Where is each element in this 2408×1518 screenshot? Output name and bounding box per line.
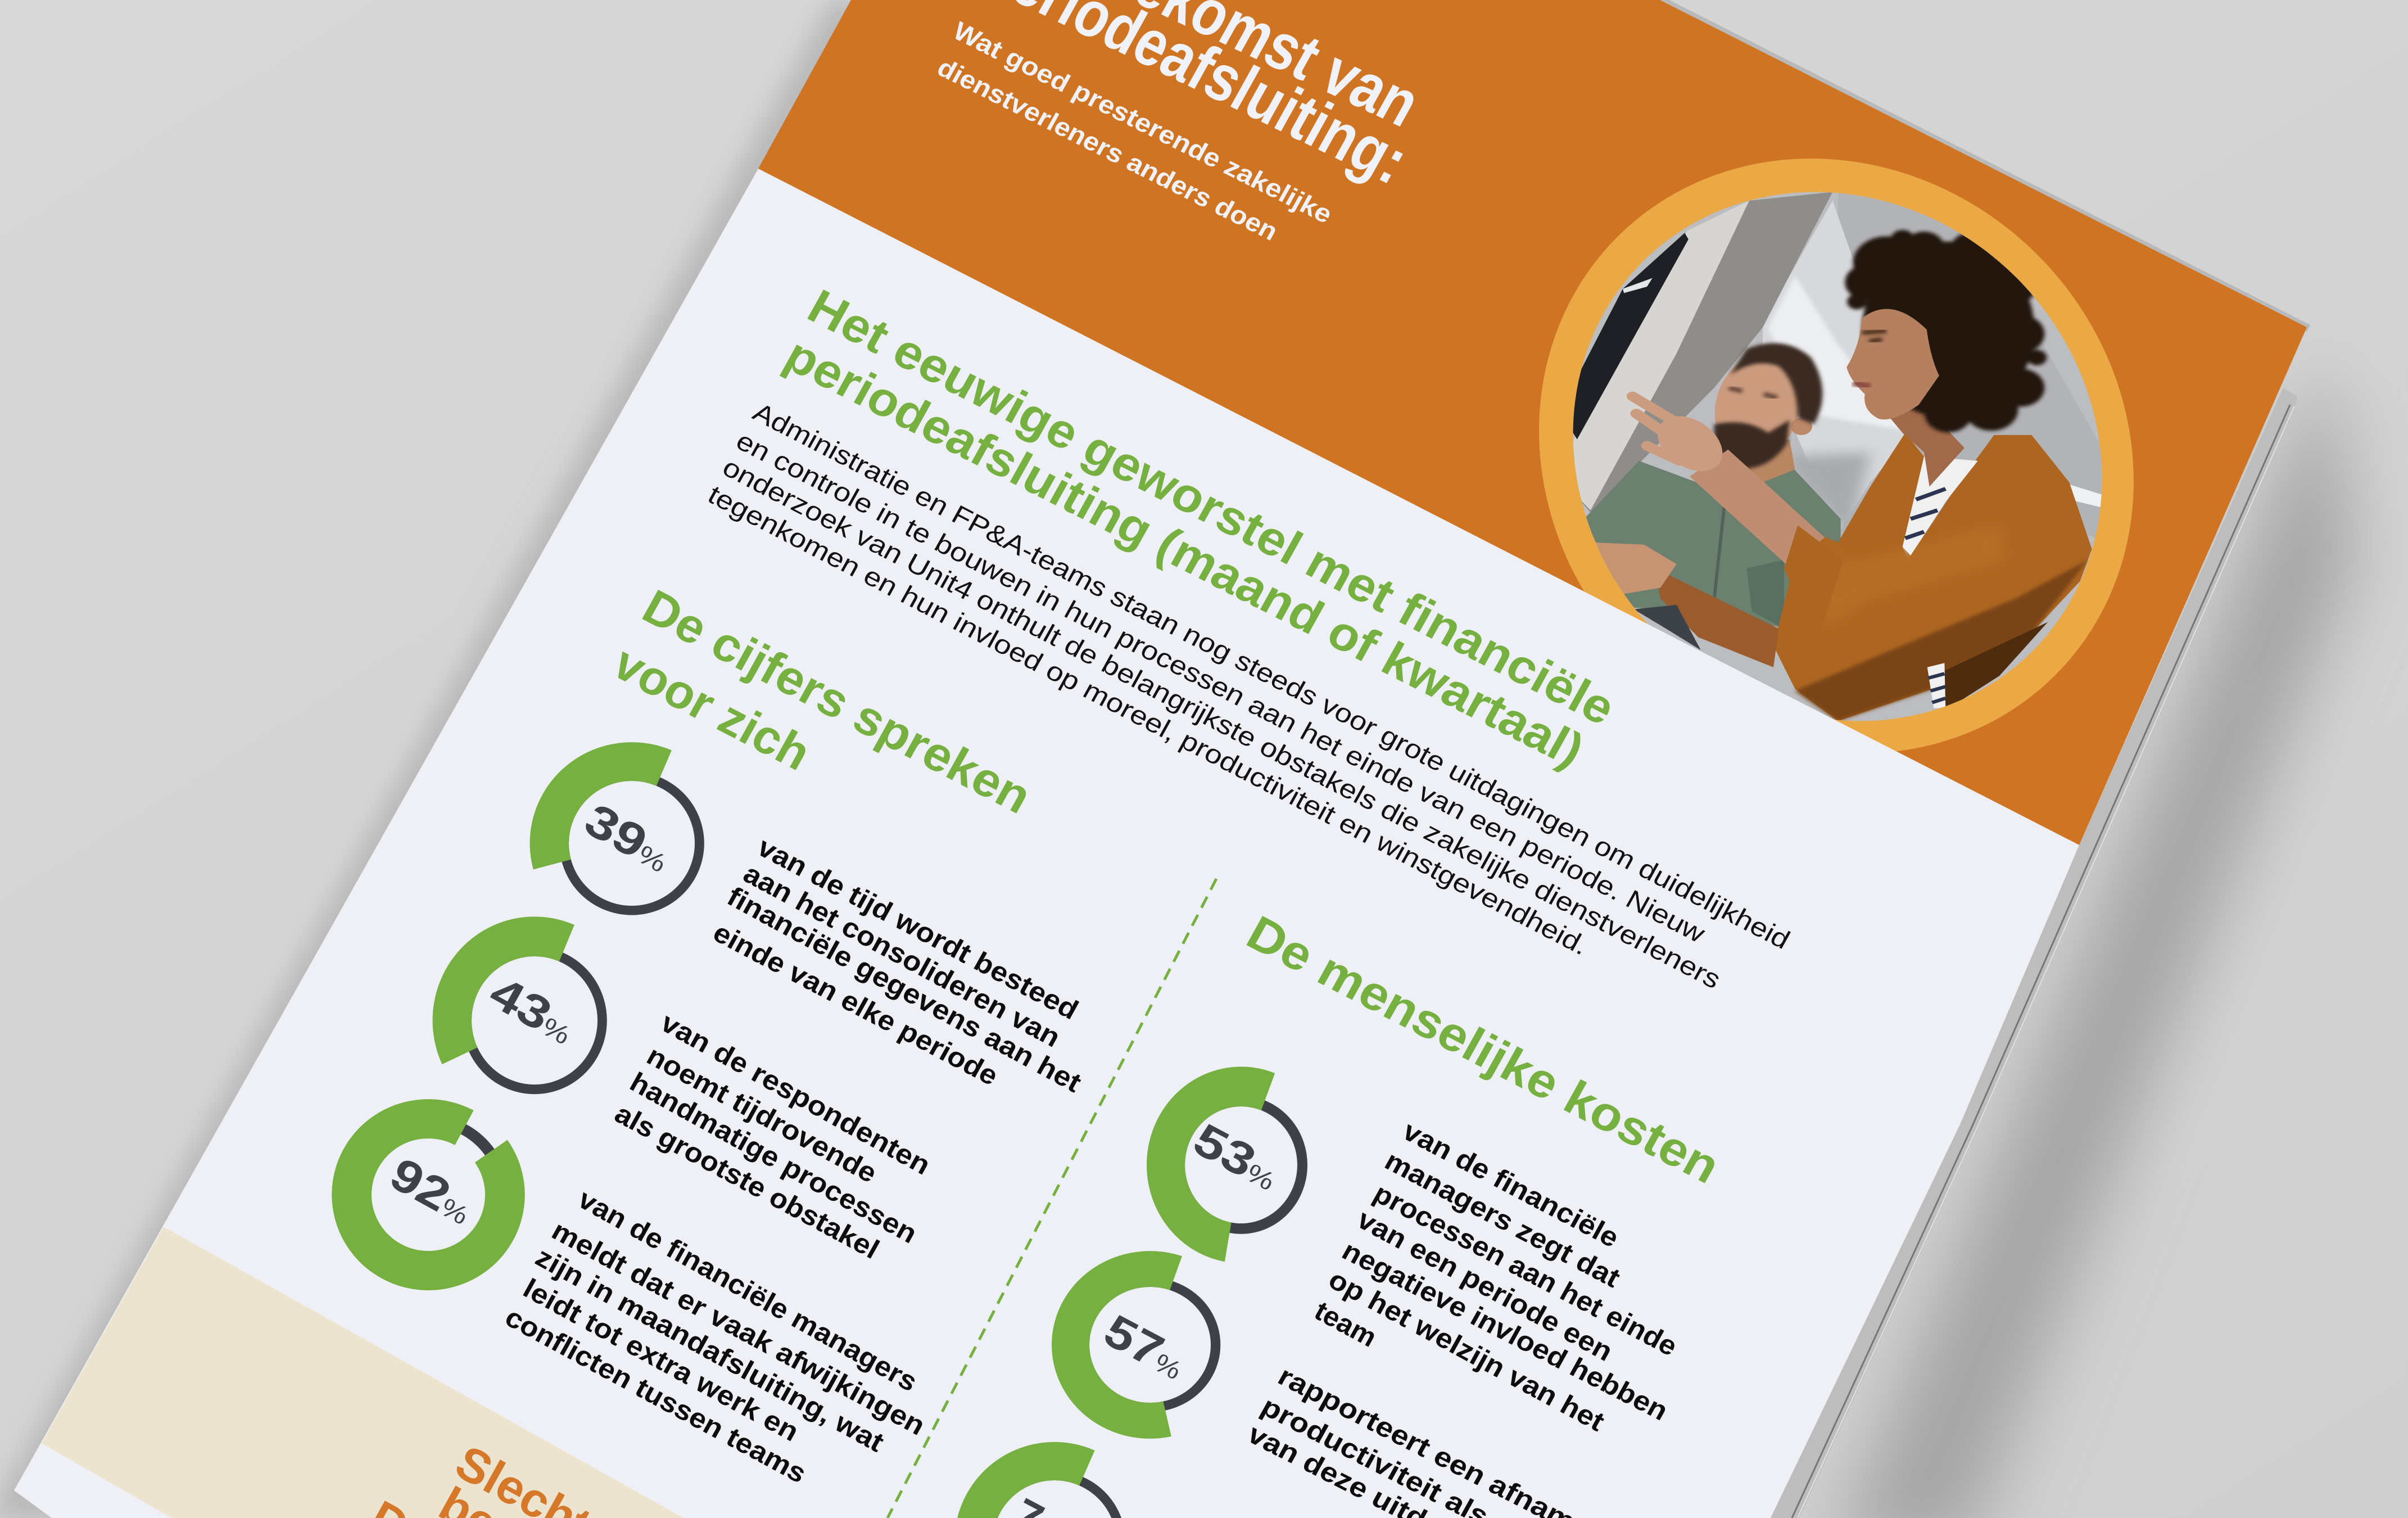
stat text: 43%: als grootste obstakel (610, 1098, 884, 1265)
photo: woman neck (1886, 388, 1965, 487)
heading: De cijfers spreken voor zich: De cijfers spreken (634, 580, 1040, 824)
photo: woman hand (1632, 396, 1736, 481)
photo: jacket body (1773, 433, 2092, 721)
main heading: Het eeuwige geworstel met financiële (799, 279, 1624, 735)
stat text: 92%: zijn in maandafsluiting, wat (531, 1241, 889, 1458)
intro text: onderzoek van Unit4 onthult de belangrijkste obstakels die zakelijke dienstverleners (718, 451, 1726, 995)
panel: orange header (758, 0, 2307, 845)
photo: pale window (1763, 201, 1913, 534)
stat: 53% donut (1154, 1074, 1328, 1255)
stat text: 92%: van de financiële managers (573, 1183, 922, 1398)
stat: 39% donut: 39% (576, 794, 680, 882)
column divider (888, 879, 1216, 1518)
stat text: 53%: processen aan het einde (1369, 1178, 1682, 1362)
stat text: 43%: noemt tijdrovende (642, 1040, 882, 1189)
stat: 57% donut: 57% (1096, 1305, 1195, 1389)
stat text: 53%: team (1310, 1295, 1382, 1353)
stat text: 43%: handmatige processen (625, 1067, 922, 1249)
photo: man hair (1730, 343, 1822, 424)
heading: De cijfers spreken voor zich: voor zich (605, 636, 820, 781)
photo: monitor (1572, 233, 1689, 439)
callout text (361, 1435, 623, 1518)
photo: woman eye, brow and lips (1862, 331, 1886, 341)
stat text: 43%: van de respondenten (656, 1007, 935, 1181)
photo ring (1416, 36, 2256, 876)
stat: 39% donut (531, 743, 733, 943)
top edge of the page (1655, 0, 2310, 332)
photo: right wall (1838, 190, 2107, 543)
stat text: 53%: negatieve invloed hebben (1337, 1235, 1673, 1426)
main heading: periodeafsluiting (maand of kwartaal) (776, 328, 1592, 778)
intro text (703, 396, 1795, 995)
stat text: 92%: meldt dat er vaak afwijkingen (547, 1215, 930, 1442)
stat text: 53% (1310, 1115, 1682, 1437)
stat text: 39%: financiële gegevens aan het (722, 881, 1087, 1099)
stat: 43% donut (425, 909, 644, 1132)
stat: 92% donut (322, 1089, 535, 1300)
intro text: Administratie en FP&A-teams staan nog steeds voor grote uitdagingen om duidelijkheid (748, 396, 1795, 955)
photo: woman raised forearm (1709, 463, 1805, 551)
photo: sleeve opening over forearm (1784, 525, 1843, 646)
photo: sleeve highlight (1817, 525, 2005, 629)
stat text: 53%: op het welzijn van het (1324, 1264, 1609, 1437)
photo: man beard (1714, 420, 1790, 469)
photo: man neck and head (1736, 439, 1795, 487)
stat: 92% donut: 92% (382, 1148, 482, 1234)
photo: jacket shadows (1795, 560, 2088, 721)
stat text: 92%: leidt tot extra werk en (518, 1273, 804, 1448)
photo: desk item (1633, 605, 1701, 650)
photo: striped shirt (1903, 457, 1978, 708)
photo: two colleagues at a screen (1573, 192, 2102, 721)
stat text: 43% (610, 1007, 935, 1265)
stat text: 39% (708, 832, 1087, 1099)
stat text: 53%: van de financiële (1398, 1115, 1624, 1254)
intro text: en controle in te bouwen in hun processen aan het einde van een periode. Nieuw (731, 425, 1711, 948)
photo: man eyes (1729, 388, 1777, 397)
stat text: 53%: managers zegt dat (1380, 1145, 1625, 1294)
heading: De menselijke kosten: De menselijke kosten (1238, 906, 1728, 1194)
subtitle: Wat goed presterende zakelijke (948, 16, 1337, 229)
stat text: 39%: aan het consolideren van (739, 858, 1065, 1053)
stat: third right donut, cropped (942, 1430, 1167, 1518)
stat text: 39%: van de tijd wordt besteed (753, 832, 1083, 1025)
photo: white wall stripe (2070, 485, 2102, 507)
stat text: 92%: conflicten tussen teams (500, 1302, 811, 1489)
stat text: 92% (500, 1183, 930, 1489)
stat text: 53%: van een periode een (1352, 1204, 1618, 1367)
subtitle: dienstverleners anders doen (933, 52, 1283, 246)
photo: woman face (1846, 309, 1939, 419)
photo: man shirt (1584, 459, 1841, 629)
intro text: tegenkomen en hun invloed op moreel, productiviteit en winstgevendheid. (703, 479, 1594, 961)
stat: 57% donut (1055, 1254, 1245, 1435)
photo: concrete pillar (1572, 192, 1832, 512)
stat: 43% donut: 43% (481, 966, 584, 1054)
photo: woman hair (1845, 230, 2047, 432)
stat: 53% donut: 53% (1185, 1114, 1288, 1200)
page stack edge (1765, 388, 2297, 1518)
panel: beige callout band (42, 1227, 684, 1518)
stat text: 39%: einde van elke periode (708, 917, 1003, 1091)
panel: white page body (14, 169, 2079, 1518)
photo: man forearm and hand (1655, 568, 1779, 667)
